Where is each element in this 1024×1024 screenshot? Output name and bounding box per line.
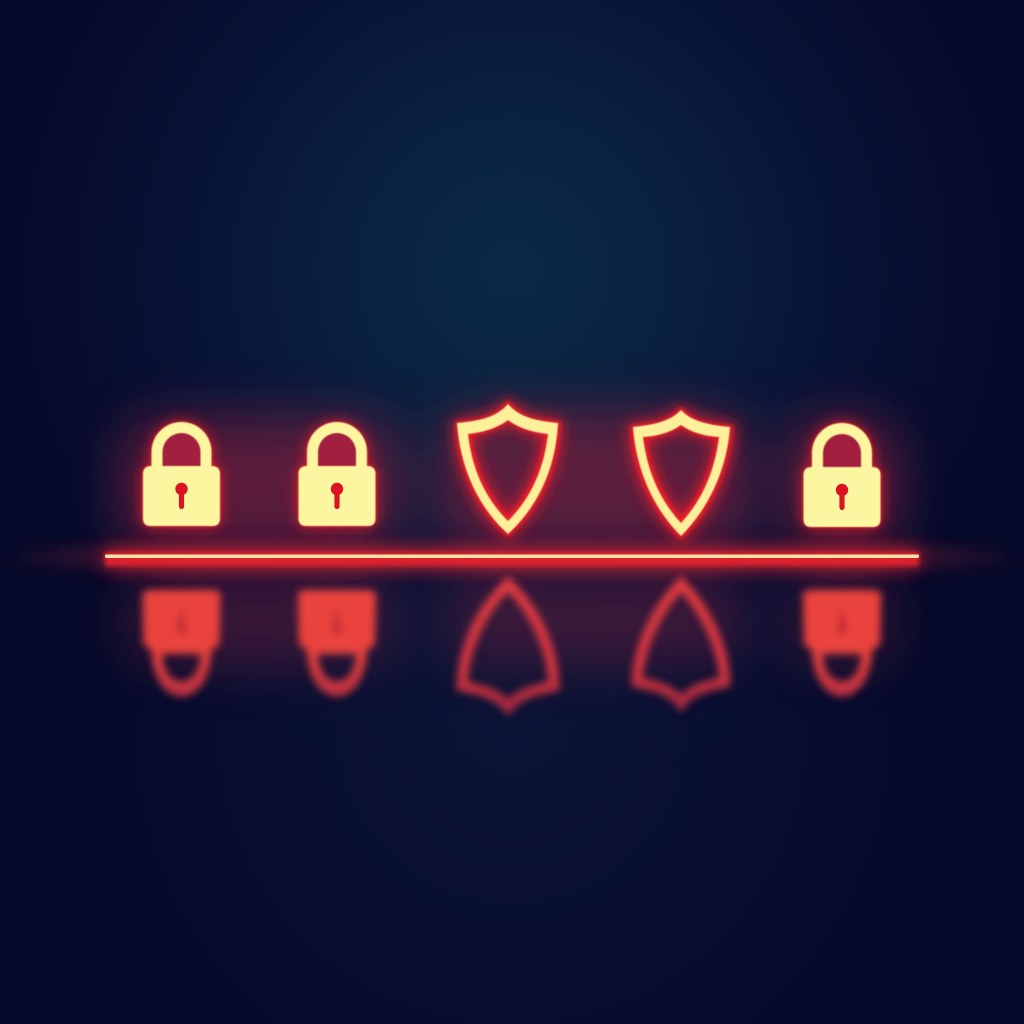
floor reflection haze — [125, 575, 895, 665]
lower floor tint — [0, 570, 1024, 1024]
reflection: lock 3 — [803, 590, 881, 696]
reflection: lock 1 — [142, 590, 220, 696]
icon glow halos — [143, 411, 880, 529]
lock 3 — [804, 423, 880, 527]
reflection: shield 1 — [462, 584, 554, 707]
lock 2 — [298, 422, 376, 526]
reflection: shield 2 — [637, 584, 725, 703]
reflection: lock 2 — [298, 590, 376, 696]
shield 1 — [457, 404, 558, 534]
red ambient haze behind icons — [120, 412, 900, 553]
shield 2 — [633, 410, 730, 536]
lock 1 — [143, 422, 220, 526]
neon horizon line — [0, 548, 1024, 570]
